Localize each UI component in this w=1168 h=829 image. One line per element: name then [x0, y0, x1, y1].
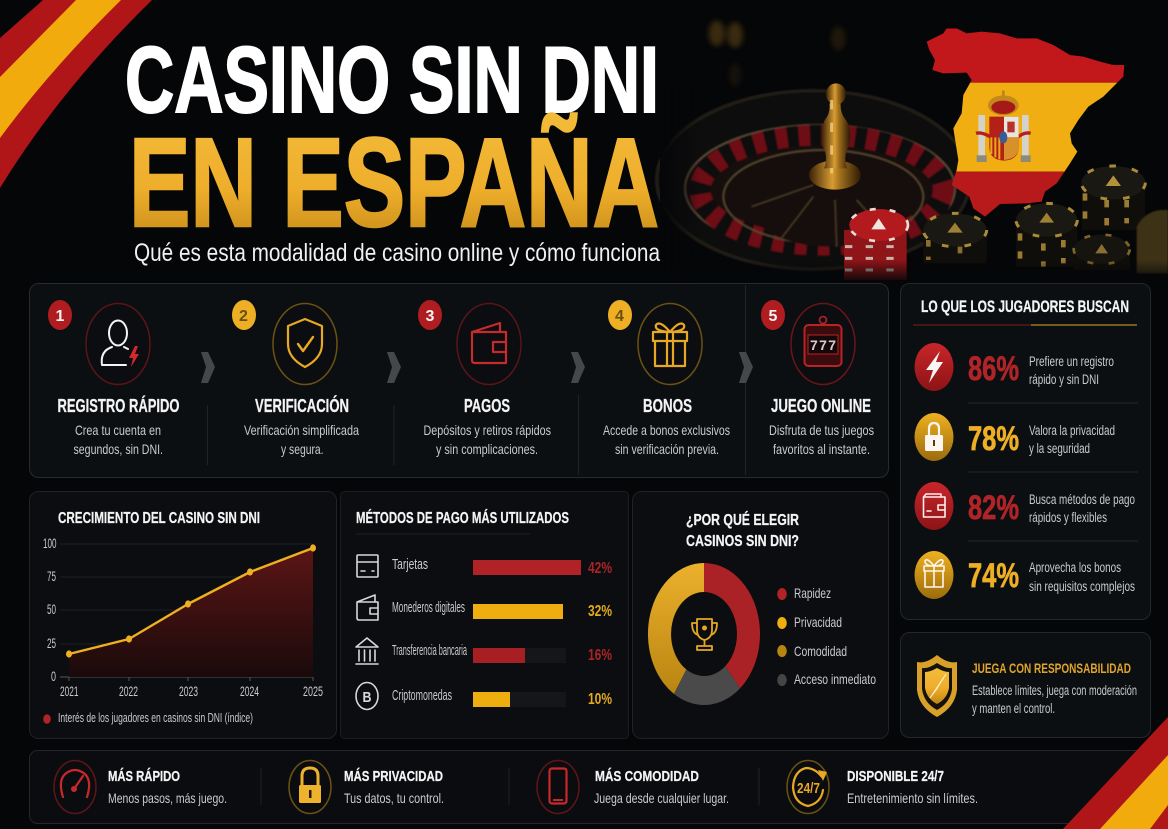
y axis and grid: [43, 536, 313, 684]
benefit: disponible 24/7: DISPONIBLE 24/7: [847, 769, 944, 785]
left fade over wheel: [660, 83, 700, 283]
step 3: pagos: y sin complicaciones.: [436, 441, 538, 457]
stat 78%: y la seguridad: [1029, 441, 1090, 456]
stat 86%: rápido y sin DNI: [1029, 372, 1099, 387]
stat 78%: 78%: [968, 420, 1019, 458]
stat 86%: [914, 343, 1114, 391]
benefit: más privacidad: MÁS PRIVACIDAD: [344, 768, 443, 785]
row: transferencia bancaria: Transferencia bancaria: [392, 642, 467, 659]
stat 78%: [914, 413, 1115, 461]
panel: por qué elegir donut chart: ¿POR QUÉ ELEGIR: [686, 510, 799, 529]
title: CASINO SIN DNI: CASINO SIN DNI: [125, 27, 659, 132]
y axis and grid: 25: [47, 636, 56, 651]
row: tarjetas: 42%: [588, 560, 612, 577]
roulette wheel: [657, 91, 970, 269]
benefit: más comodidad: MÁS COMODIDAD: [595, 768, 699, 785]
benefit: disponible 24/7: 24/7: [797, 780, 820, 797]
panel: juega con responsabilidad: [900, 632, 1150, 738]
donut chart: [648, 563, 760, 705]
donut legend: Rapidez: [794, 585, 831, 601]
stat 82%: 82%: [968, 489, 1019, 527]
benefit: más privacidad: Tus datos, tu control.: [344, 790, 444, 806]
step 2: verificación: Verificación simplificada: [244, 422, 359, 438]
row: monederos digitales: 32%: [588, 603, 612, 620]
benefit: más privacidad: [289, 760, 444, 814]
stat 74%: [914, 551, 1135, 599]
step 5: juego online: [761, 300, 874, 457]
panel: juega con responsabilidad: y manten el control.: [972, 701, 1055, 716]
panel: five steps: [30, 284, 888, 478]
x axis labels: 2024: [240, 684, 259, 699]
row: tarjetas: Tarjetas: [392, 556, 428, 573]
row: transferencia bancaria: [356, 638, 612, 664]
y axis and grid: 100: [43, 536, 56, 551]
step 4: bonos: [603, 300, 730, 457]
panel: por qué elegir donut chart: [632, 492, 888, 738]
donut legend: Privacidad: [794, 614, 842, 630]
stat 74%: 74%: [968, 557, 1019, 595]
step 4: bonos: sin verificación previa.: [615, 441, 719, 457]
step 2: verificación: VERIFICACIÓN: [255, 395, 349, 416]
chart legend: [43, 710, 253, 725]
step 2: verificación: 2: [239, 308, 248, 325]
area under line: [69, 548, 313, 677]
donut legend: [777, 585, 876, 687]
y axis and grid: 50: [47, 602, 56, 617]
step 4: bonos: Accede a bonos exclusivos: [603, 422, 730, 438]
coat of arms: [976, 91, 1031, 162]
step 4: bonos: 4: [615, 308, 624, 325]
bokeh background lights: [709, 21, 846, 87]
step 1: registro rápido: segundos, sin DNI.: [74, 441, 163, 457]
icon: trophy: [692, 619, 717, 650]
x axis labels: 2025: [303, 684, 323, 699]
x axis labels: 2022: [119, 684, 138, 699]
benefit: disponible 24/7: Entretenimiento sin límites.: [847, 790, 978, 806]
black and gold chip stacks: [923, 166, 1168, 273]
ribbon: Spanish flag bottom right: [1063, 717, 1168, 829]
growth line with points: [66, 544, 316, 658]
x axis labels: 2023: [179, 684, 198, 699]
panel: por qué elegir donut chart: CASINOS SIN DNI?: [686, 533, 799, 550]
panel: bottom benefits strip: [30, 750, 1160, 824]
step 5: juego online: 5: [768, 308, 778, 325]
step 5: juego online: JUEGO ONLINE: [771, 395, 871, 416]
x axis labels: [60, 684, 323, 699]
panel: payment methods bar chart: MÉTODOS DE PAGO MÁS UTILIZADOS: [356, 508, 569, 527]
step 2: verificación: [232, 300, 359, 457]
step 2: verificación: y segura.: [281, 441, 324, 457]
chart legend: Interés de los jugadores en casinos sin DNI (índice): [58, 710, 253, 725]
hero image: roulette, chips and map of Spain: [657, 21, 1168, 283]
y axis and grid: 0: [51, 669, 56, 684]
arrows between steps: [201, 352, 753, 383]
benefit: más rápido: Menos pasos, más juego.: [108, 790, 227, 806]
ribbon: Spanish flag top left: [0, 0, 152, 188]
stat 86%: Prefiere un registro: [1029, 354, 1114, 369]
stat 82%: rápidos y flexibles: [1029, 510, 1107, 525]
benefit: más rápido: MÁS RÁPIDO: [108, 768, 180, 785]
title: EN ESPAÑA: EN ESPAÑA: [129, 112, 659, 253]
step 3: pagos: Depósitos y retiros rápidos: [424, 422, 551, 438]
row: criptomonedas: [356, 682, 612, 710]
row: criptomonedas: Criptomonedas: [392, 687, 452, 704]
stat 82%: [914, 482, 1135, 530]
row: transferencia bancaria: 16%: [588, 647, 612, 664]
step 1: registro rápido: Crea tu cuenta en: [75, 422, 161, 438]
step 5: juego online: 777: [810, 337, 836, 353]
stat 78%: Valora la privacidad: [1029, 423, 1115, 438]
row: monederos digitales: [357, 595, 612, 620]
donut legend: Comodidad: [794, 643, 847, 659]
benefit: más comodidad: [537, 760, 729, 814]
donut legend: Acceso inmediato: [794, 671, 876, 687]
step 5: juego online: favoritos al instante.: [773, 441, 870, 457]
step 3: pagos: 3: [426, 308, 434, 325]
subtitle: Qué es esta modalidad de casino online y cómo funciona: [134, 239, 660, 267]
hero bottom fade: [673, 260, 1168, 283]
icon: gold shield: [917, 655, 957, 717]
roulette spindle: [809, 83, 861, 190]
step 3: pagos: [418, 300, 551, 457]
row: tarjetas: [357, 555, 612, 577]
panel: growth line chart: CRECIMIENTO DEL CASINO SIN DNI: [58, 510, 260, 527]
row: criptomonedas: 10%: [588, 691, 612, 708]
x axis labels: 2021: [60, 684, 78, 699]
step 4: bonos: BONOS: [643, 395, 692, 416]
step 5: juego online: Disfruta de tus juegos: [769, 422, 874, 438]
red chip stack: [844, 209, 908, 280]
benefit: más rápido: [54, 760, 227, 814]
benefit: disponible 24/7: [787, 760, 978, 814]
step 1: registro rápido: REGISTRO RÁPIDO: [58, 395, 180, 416]
stat 74%: Aprovecha los bonos: [1029, 560, 1121, 575]
row: monederos digitales: Monederos digitales: [392, 599, 465, 616]
map of Spain with flag: [923, 27, 1130, 218]
panel: payment methods bar chart: [340, 492, 628, 738]
panel: growth line chart: [30, 492, 336, 738]
step 1: registro rápido: 1: [56, 308, 64, 325]
step 3: pagos: PAGOS: [464, 395, 510, 416]
stat 86%: 86%: [968, 350, 1019, 388]
row: criptomonedas: B: [362, 689, 372, 706]
y axis and grid: 75: [47, 569, 56, 584]
panel: lo que los jugadores buscan: [900, 284, 1150, 620]
step 1: registro rápido: [48, 300, 180, 457]
benefit: más comodidad: Juega desde cualquier lugar.: [594, 790, 729, 806]
